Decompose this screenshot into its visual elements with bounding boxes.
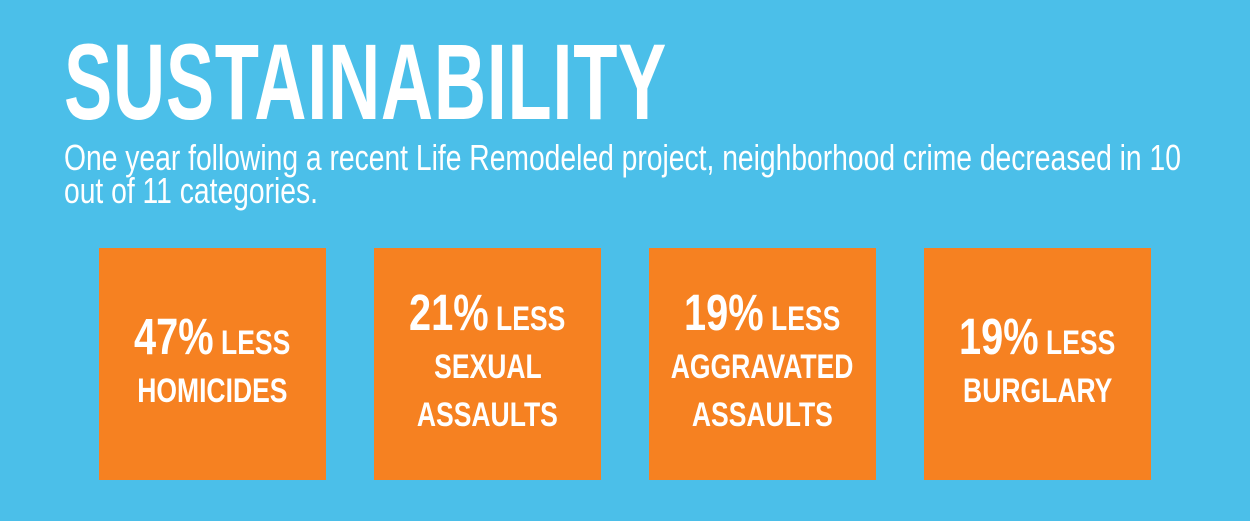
panel: sexual assaults: [374, 248, 601, 480]
panel: aggravated assaults: ASSAULTS: [692, 396, 833, 434]
subtitle text: out of 11 categories.: [64, 170, 318, 211]
panel: sexual assaults: SEXUAL: [434, 348, 541, 386]
panel: aggravated assaults: 19% LESS: [684, 284, 841, 341]
panel: burglary: 19% LESS: [959, 308, 1116, 365]
panel: homicides: 47% LESS: [134, 308, 291, 365]
panel: sexual assaults: 21% LESS: [409, 284, 566, 341]
subtitle text: [64, 137, 1181, 211]
panel: burglary: [924, 248, 1151, 480]
title: SUSTAINABILITY: [64, 21, 667, 142]
panel: aggravated assaults: [649, 248, 876, 480]
panel: homicides: HOMICIDES: [137, 372, 288, 410]
subtitle text: One year following a recent Life Remodeled project, neighborhood crime decreased in 10: [64, 137, 1181, 178]
panel: homicides: [99, 248, 326, 480]
panel: aggravated assaults: AGGRAVATED: [671, 348, 854, 386]
panel: sexual assaults: ASSAULTS: [417, 396, 558, 434]
panel: burglary: BURGLARY: [963, 372, 1112, 410]
